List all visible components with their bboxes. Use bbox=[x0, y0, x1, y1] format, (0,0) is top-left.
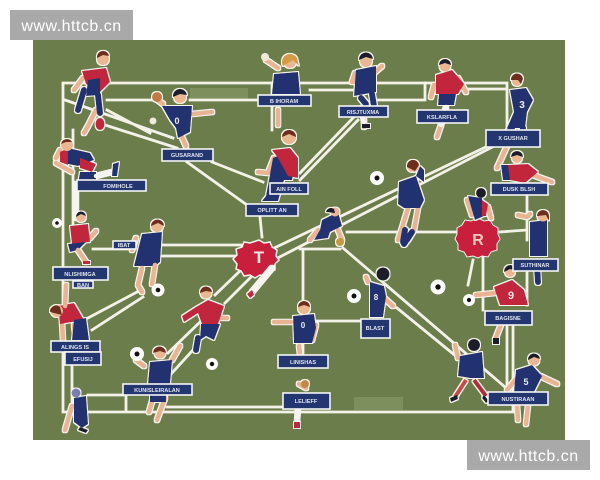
red burst badge: centre bbox=[233, 240, 279, 278]
player labels: KUNISLEIRALAN bbox=[134, 388, 180, 394]
player labels: BLAST bbox=[366, 326, 385, 332]
red burst badge: right bbox=[455, 218, 500, 258]
footballs bbox=[52, 53, 474, 370]
player: navy and red kicking lower right bbox=[450, 339, 489, 403]
player: navy right side bbox=[518, 210, 549, 282]
player labels: ALINGS IS bbox=[61, 345, 89, 351]
player labels: EFUSIJ bbox=[73, 357, 93, 363]
watermark: bottom right bbox=[467, 440, 590, 470]
player labels: KSLARFLA bbox=[427, 115, 457, 121]
player labels: BAN bbox=[77, 283, 89, 289]
player labels: IBAT bbox=[118, 243, 131, 249]
player: red and navy left kicking bbox=[56, 139, 119, 218]
player: red centre left bbox=[182, 286, 227, 350]
watermark: top left: www.httcb.cn bbox=[20, 18, 122, 35]
player labels: RISJTUXMA bbox=[347, 110, 379, 116]
player: red right lower: 9 bbox=[508, 290, 514, 302]
player: bottom centre bbox=[294, 380, 309, 428]
player: navy number 3 right bbox=[497, 73, 533, 168]
player: navy number 0 bbox=[152, 89, 212, 146]
player: navy centre bottom bbox=[274, 301, 316, 362]
player: navy with ball bottom left bbox=[136, 346, 180, 420]
player: top left red and navy bbox=[74, 51, 110, 133]
player: blonde navy top centre bbox=[266, 54, 300, 125]
player labels: NLISHIMGA bbox=[64, 272, 96, 278]
player: navy number 3 right: 3 bbox=[519, 100, 525, 111]
player: navy number 8 bbox=[366, 268, 393, 317]
player: navy centre right bbox=[398, 160, 424, 244]
player: navy crouching centre bbox=[310, 208, 344, 246]
player labels: FOMIHOLE bbox=[103, 184, 133, 190]
player labels: LELIEFF bbox=[295, 399, 318, 405]
player labels: B IHORAM bbox=[270, 99, 298, 105]
player: red kicking centre bbox=[247, 268, 272, 298]
player: navy centre bottom: 0 bbox=[301, 321, 306, 330]
pitch and passing lines bbox=[63, 83, 527, 412]
red burst badge: right: R bbox=[472, 232, 484, 249]
player: navy number 5 lower right bbox=[507, 353, 557, 424]
player: navy top centre right bbox=[352, 52, 382, 128]
player labels: SUTHINAR bbox=[521, 263, 549, 269]
watermark: top left bbox=[10, 10, 133, 40]
player labels: GUSARAND bbox=[171, 153, 203, 159]
player labels: OPLITT AN bbox=[257, 208, 287, 214]
player labels: AIN FOLL bbox=[276, 187, 302, 193]
player: red bent left bbox=[50, 285, 89, 342]
player: red right lower bbox=[476, 265, 528, 344]
player labels: X GUSHAR bbox=[498, 136, 528, 142]
player: red and navy centre bbox=[258, 130, 298, 201]
pale pitch patches bbox=[190, 88, 403, 410]
player labels bbox=[51, 95, 558, 409]
player: navy and red above burst bbox=[467, 188, 491, 220]
player labels: DUSK BLSH bbox=[503, 187, 535, 193]
player: navy bottom left corner bbox=[65, 388, 88, 433]
player: navy number 8: 8 bbox=[374, 293, 379, 302]
player labels: LINISHAS bbox=[290, 360, 316, 366]
player: navy left centre bbox=[132, 220, 164, 292]
red burst badge: centre: T bbox=[254, 248, 265, 267]
watermark: bottom right: www.httcb.cn bbox=[477, 448, 579, 465]
player labels: NUSTIRAAN bbox=[502, 397, 534, 403]
player: red top right bbox=[431, 59, 466, 137]
player labels: BAGISNE bbox=[495, 316, 521, 322]
football pitch background bbox=[33, 40, 565, 440]
player: navy number 0: 0 bbox=[174, 116, 180, 126]
player: red left middle bbox=[68, 211, 96, 264]
player: navy number 5 lower right: 5 bbox=[523, 377, 529, 387]
player: red right upper bbox=[501, 151, 552, 183]
